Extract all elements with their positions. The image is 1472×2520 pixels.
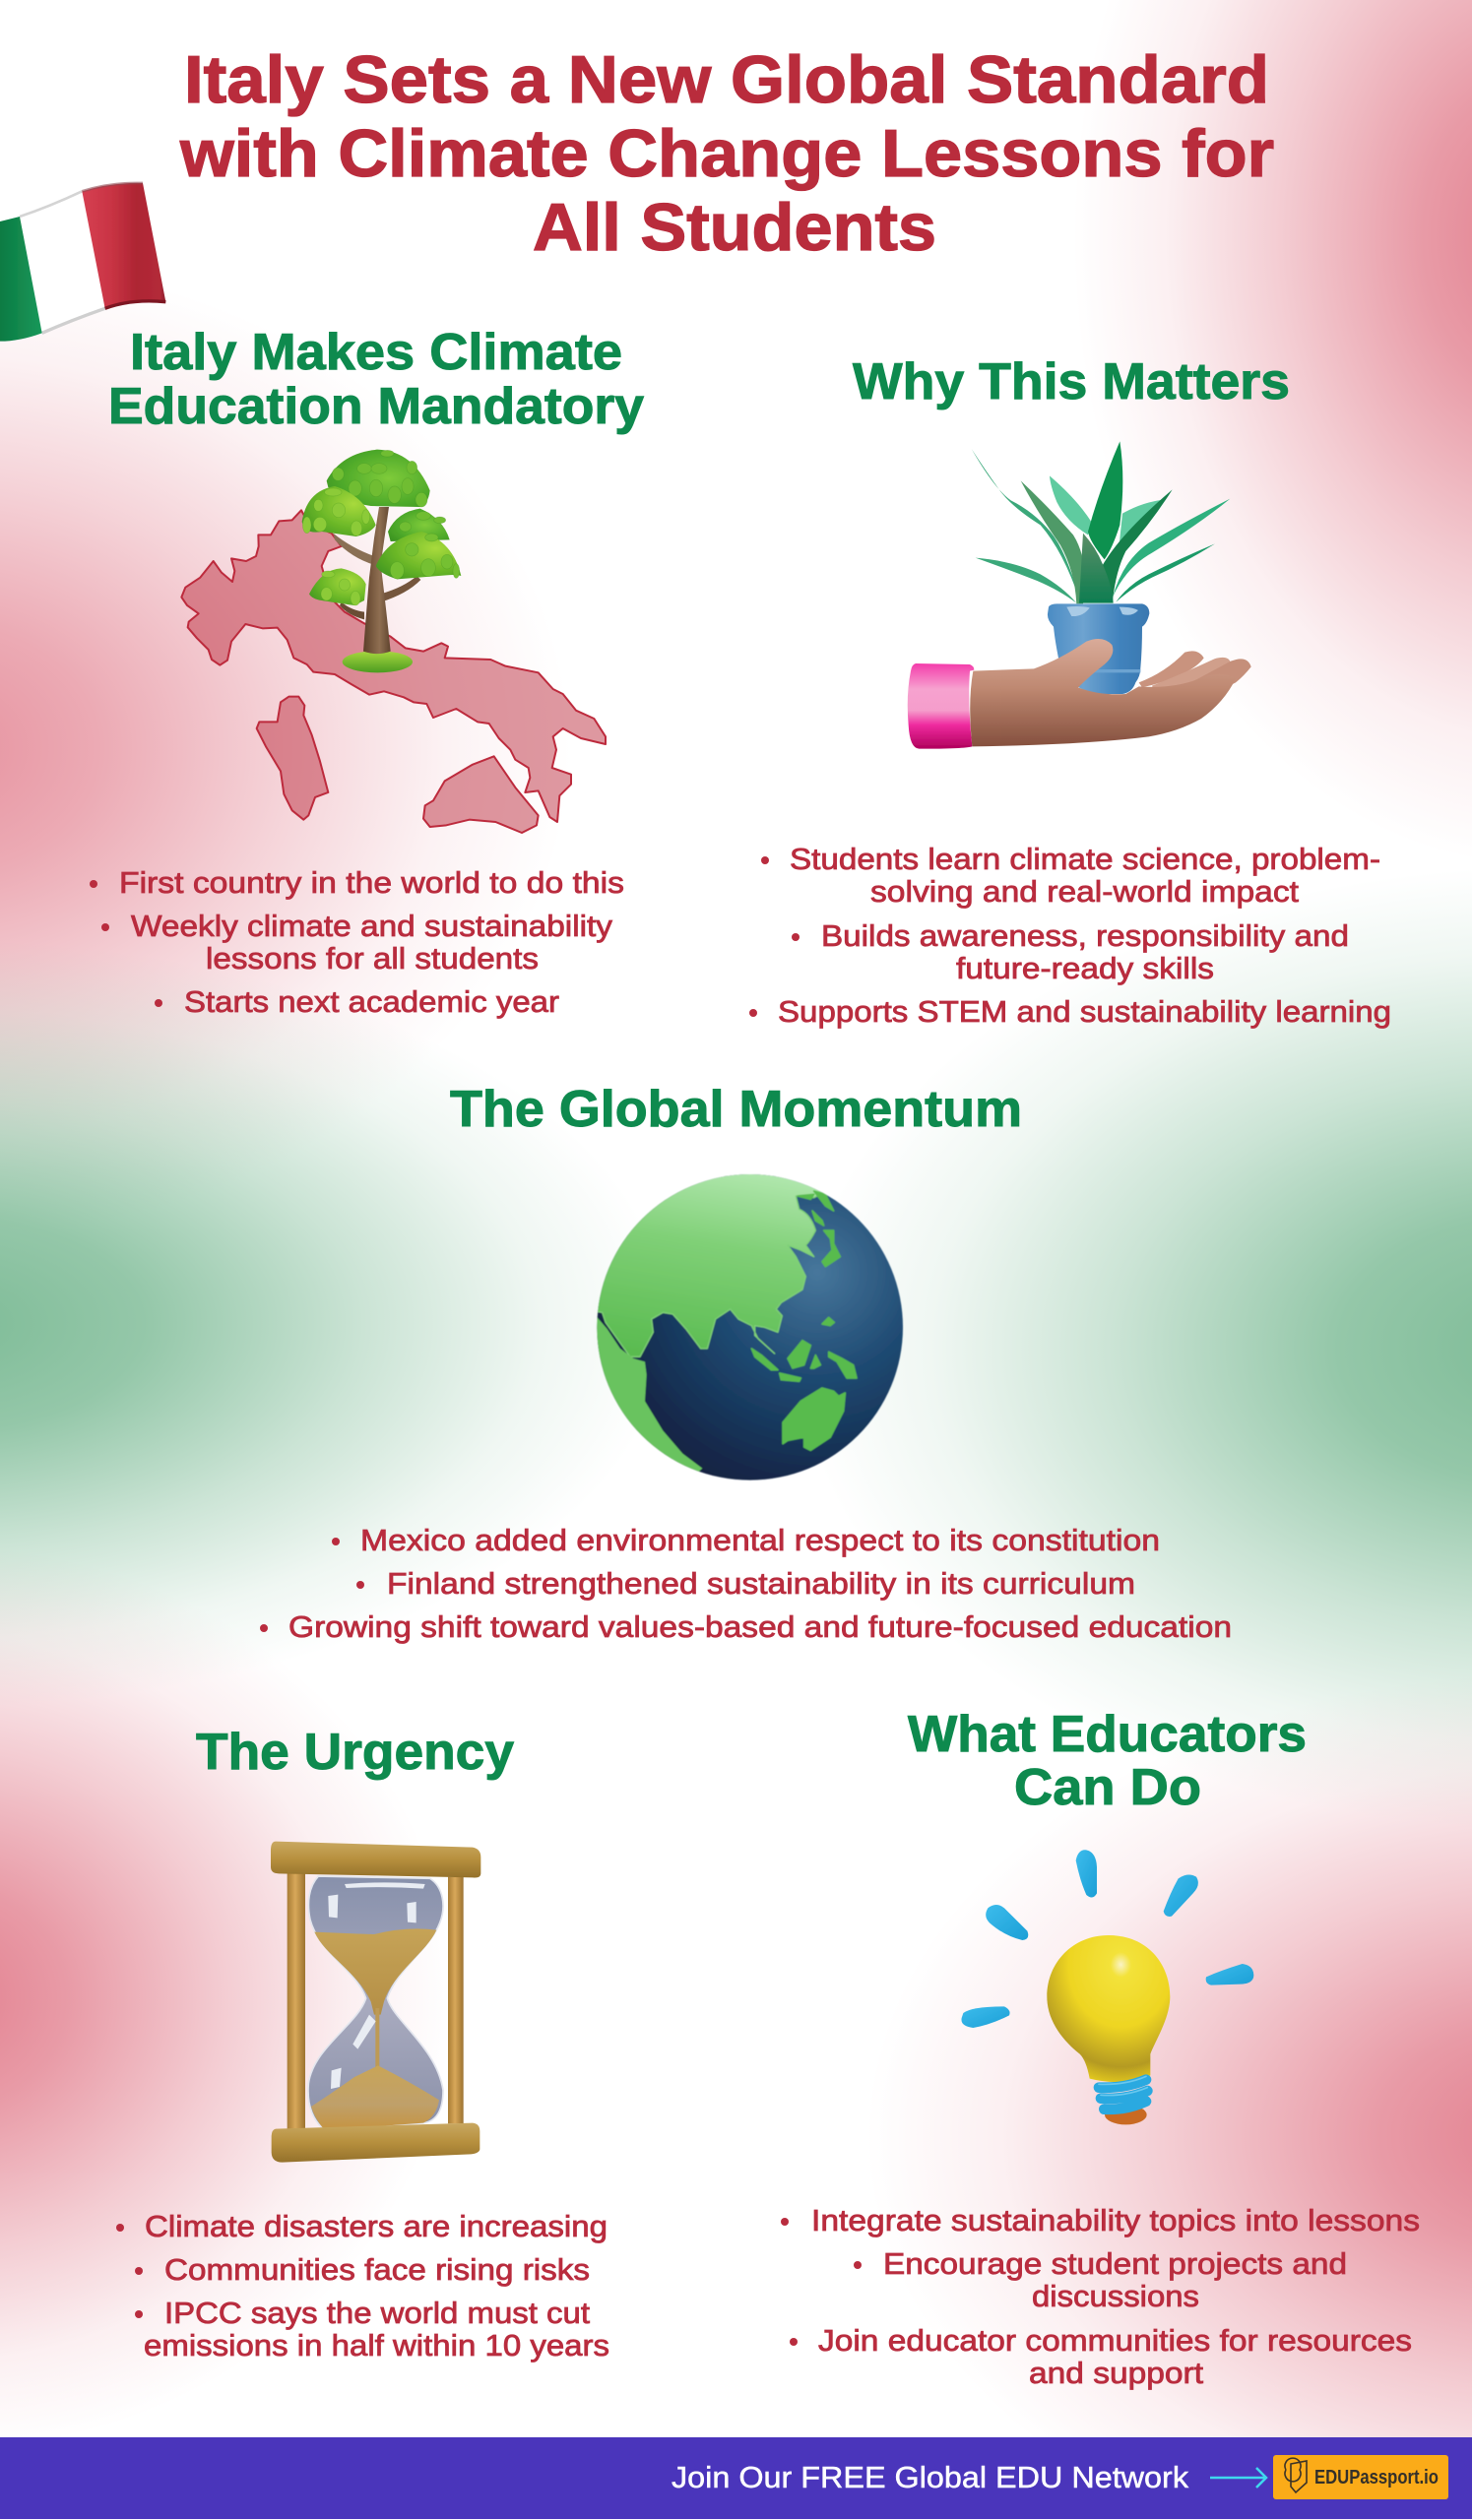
bullet list: discussions bbox=[1032, 2279, 1199, 2313]
panel: the global momentum bbox=[260, 1081, 1232, 1644]
heading: The Global Momentum bbox=[450, 1081, 1022, 1138]
title: All Students bbox=[533, 190, 936, 265]
panel: why this matters bbox=[749, 353, 1391, 1029]
arrow bbox=[1210, 2468, 1266, 2488]
logo button: EDUPassport.io bbox=[1314, 2467, 1439, 2488]
bullet list: First country in the world to do this bbox=[119, 865, 624, 900]
bullet list: Finland strengthened sustainability in its curriculum bbox=[387, 1566, 1135, 1601]
logo button bbox=[1273, 2455, 1448, 2499]
bullet list: Students learn climate science, problem- bbox=[790, 842, 1380, 876]
icon: globe bbox=[578, 1165, 903, 1486]
panel: what educators can do bbox=[781, 1706, 1420, 2390]
heading: Education Mandatory bbox=[108, 378, 644, 435]
bullet list: Supports STEM and sustainability learning bbox=[778, 994, 1391, 1029]
bullet list bbox=[116, 2209, 609, 2362]
heading: Italy Makes Climate bbox=[130, 324, 622, 381]
bullet list: future-ready skills bbox=[956, 951, 1214, 985]
title bbox=[179, 42, 1274, 265]
title: with Climate Change Lessons for bbox=[179, 116, 1274, 191]
icon: map of Italy with tree bbox=[181, 450, 606, 833]
bullet list bbox=[260, 1523, 1232, 1644]
heading bbox=[908, 1706, 1307, 1816]
heading: What Educators bbox=[908, 1706, 1307, 1763]
heading: Can Do bbox=[1014, 1759, 1201, 1816]
bullet list: and support bbox=[1029, 2356, 1203, 2390]
heading: The Urgency bbox=[196, 1724, 514, 1781]
bullet list: Integrate sustainability topics into lessons bbox=[811, 2203, 1420, 2237]
bullet list: Mexico added environmental respect to its constitution bbox=[360, 1523, 1160, 1557]
bullet list: Builds awareness, responsibility and bbox=[821, 918, 1349, 953]
bullet list bbox=[90, 865, 624, 1019]
call to action: Join Our FREE Global EDU Network bbox=[672, 2460, 1189, 2494]
icon: hourglass bbox=[271, 1842, 480, 2163]
heading: Why This Matters bbox=[853, 353, 1290, 410]
heading bbox=[108, 324, 644, 435]
bullet list: emissions in half within 10 years bbox=[144, 2328, 609, 2362]
bullet list: Growing shift toward values-based and future-focused education bbox=[288, 1609, 1232, 1644]
panel: Italy makes climate education mandatory bbox=[90, 324, 644, 1019]
bullet list: Join educator communities for resources bbox=[818, 2323, 1412, 2358]
icon: light bulb bbox=[961, 1850, 1253, 2124]
title: Italy Sets a New Global Standard bbox=[184, 42, 1269, 117]
bullet list: IPCC says the world must cut bbox=[164, 2296, 590, 2330]
bullet list bbox=[781, 2203, 1420, 2390]
bullet list bbox=[749, 842, 1391, 1029]
icon: Italian flag bbox=[0, 183, 165, 342]
footer banner bbox=[0, 2437, 1472, 2519]
bullet list: Climate disasters are increasing bbox=[145, 2209, 608, 2243]
bullet list: Communities face rising risks bbox=[164, 2252, 590, 2287]
bullet list: Encourage student projects and bbox=[883, 2246, 1347, 2281]
icon: hand holding potted plant bbox=[908, 441, 1251, 749]
bullet list: solving and real-world impact bbox=[870, 874, 1299, 909]
bullet list: Starts next academic year bbox=[184, 984, 559, 1019]
bullet list: Weekly climate and sustainability bbox=[131, 909, 613, 943]
bullet list: lessons for all students bbox=[206, 941, 539, 976]
panel: the urgency bbox=[116, 1724, 609, 2362]
